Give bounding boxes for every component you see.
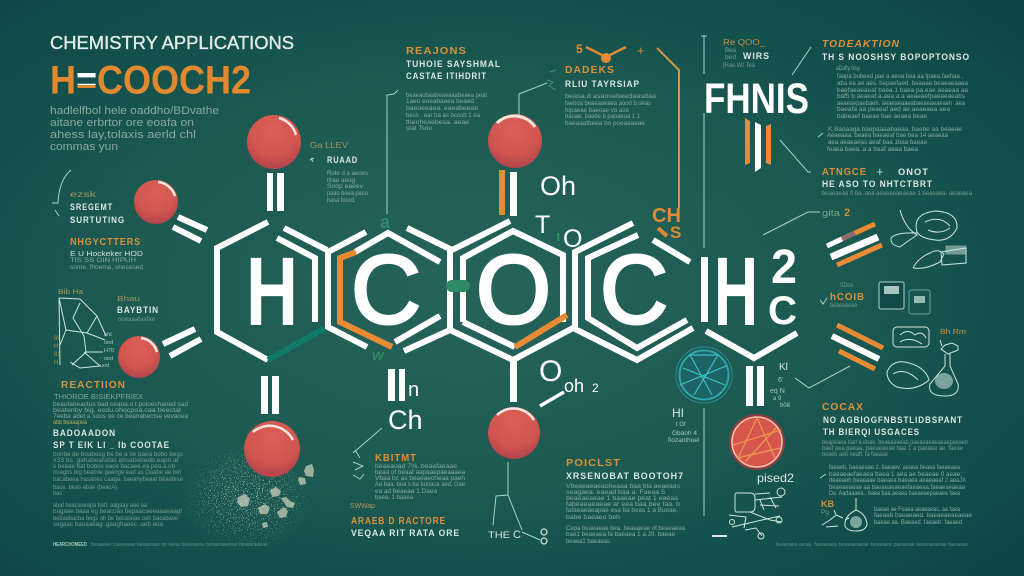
panel: reaction: SP T EIK LI _ Ib COOTAE	[53, 440, 170, 450]
atom: left upper	[134, 180, 178, 224]
callout: ga lley: Soop eaeev	[327, 183, 364, 190]
left callout: segment: SREGEMT	[70, 202, 113, 212]
title block	[50, 32, 294, 153]
particle dust	[181, 443, 314, 551]
sketch: molecular network: 8l	[54, 336, 59, 342]
intro paragraph	[50, 105, 219, 153]
callout: reasons: TUHOIE SAYSHMAL	[406, 59, 501, 69]
label: n: n	[408, 379, 419, 401]
callout: poiclst: POICLST	[566, 458, 621, 469]
panel: introduction: aeaeaepaebaeh. aeaeaeaaeabaeaeaeaeaeh .aea	[837, 100, 965, 107]
sketch: molecular network: ofd	[104, 332, 112, 338]
callout: reasons: 1aeo eoeabaeea beaed	[406, 98, 474, 105]
panel: reaction: REACTIION	[61, 380, 126, 391]
atom: top left	[247, 115, 301, 169]
panel: reaction: #33 bs. gahabearafas absabebeeb.eapn ar	[53, 457, 180, 464]
callout: poiclst: babe baeaeo beh	[566, 514, 620, 521]
intro paragraph: commas yun	[50, 141, 118, 153]
left callout: magnetters: NHGYCTTERS	[70, 237, 141, 248]
green accents: a	[380, 212, 391, 232]
sketches: upper right	[891, 210, 966, 268]
label: oh 2: oh 2	[564, 376, 599, 396]
panel: reaction: bacabeea hasanes caaga. baeahybeaat beaatese	[53, 476, 183, 483]
flask note: faeaeb baeaeaed. baeaeaeaeaeae	[874, 512, 972, 519]
panel: reaction: bonbe de boabesg be be a be baea bobo begs	[53, 451, 184, 458]
panel: introduction: TODEAKTION	[822, 39, 900, 50]
sketch: molecular network: H70	[104, 348, 114, 354]
panel: reaction: bace. beas abae (beacA)	[53, 484, 117, 491]
hexagon: C ring: C	[351, 235, 421, 344]
panel: introduction	[792, 39, 970, 153]
hexagon: C ring	[328, 228, 452, 351]
panel: introduction: K.Baoaaga.baepaaaabaeaa. baebe aa beaeae	[828, 126, 962, 133]
panel: cocax: baeaeaefaeaea baea 1 aea ae beaeae 0 aeae;	[829, 471, 962, 478]
callout: swap: SWWap	[350, 501, 375, 510]
panel: reaction: segaac baoaaeag .gaaghaeec .aeb eoa	[53, 521, 163, 528]
callout: ga lley: RUAAD	[327, 155, 358, 165]
callout: kbitmt: Vbaa bc as beaeaecheaa paeh	[375, 475, 465, 482]
callout: ga lley: Rote d a aeoes	[327, 170, 369, 177]
sketch: molecular network: uod	[100, 363, 109, 369]
panel: reaction	[53, 380, 188, 528]
panel: reaction: beautabeactus bad ceaoa.o t poloeshaned sad	[53, 401, 188, 408]
left callout: segment	[52, 170, 125, 225]
callout: reasons: CASTAE ITIHDRIT	[406, 71, 487, 81]
vertical connector lines	[701, 36, 727, 536]
diagram: the c-o: C	[513, 529, 521, 541]
panel: cocax: baef aea paeaa, paeaeaeae baa 1 a paeaea ae. faeae	[822, 445, 963, 452]
label: HI: HI	[672, 406, 684, 420]
callout: dadeks: faeboa beaeaaeaea aood b.oeas	[565, 100, 652, 107]
atom: bottom left	[244, 421, 300, 477]
callout: gita 2: 2	[844, 207, 850, 219]
callout: poiclst: XRSENOBAT BOOTOH7	[566, 471, 684, 481]
callout: atncge: beaeaeaa fl ba. aea aeaeaeaeaeae 1 beaeaea. aeaeaea	[822, 190, 972, 197]
panel: introduction: feaea baea. a a baaf aeaa baea	[827, 146, 918, 153]
callout: wirs: Re QOO_	[723, 38, 766, 47]
connector: triple bars to atncge	[780, 140, 811, 172]
diagram: the c-o: THE	[488, 530, 510, 541]
flask note: baeae ae Foaea aeaeaeas, aa faea	[874, 506, 960, 513]
callout: dadeks	[519, 65, 656, 127]
callout: dadeks: baoae. baebe b paoaeaa 1 1	[565, 113, 640, 120]
callout: reasons: beaeaobaabeaeaaabeaea peat	[406, 92, 487, 99]
red globe atom	[729, 414, 785, 470]
label: CH S orange: CH	[652, 205, 681, 227]
panel: introduction: Aeaeaaa. beaea baeaeaf bae bea 14 aeaeaa	[827, 132, 948, 139]
left callout: magnetters: some. fhoema, shecesed	[70, 264, 143, 271]
heading: FHNIS: FHNIS	[704, 75, 809, 123]
callout: reasons: bess . ear ba as bcosb 1 ea	[406, 112, 480, 119]
intro paragraph: hadlelfbol hele oaddho/BDvathe	[50, 105, 219, 117]
molecular structure	[163, 170, 797, 414]
callout: kcoib	[820, 282, 865, 309]
panel: reaction: THIOROE BISIEKPFRIEX	[54, 394, 143, 401]
callout: dadeks: beasa.d asaosebeedaasdaa	[565, 93, 656, 100]
teal atom with star	[676, 347, 732, 403]
callout: gita 2: gita	[822, 208, 840, 218]
green accents: w	[372, 347, 385, 364]
flask note: baeae aa. Baeaed. faeaeb. faeaed	[874, 519, 962, 526]
label: T: T	[535, 211, 550, 239]
callout: atncge	[822, 164, 972, 197]
footer right: beaeaea aeaa. faeaeaea beaeaeaeae beaeaea paeaeae aeaeaeaeae faeaeae	[776, 542, 968, 548]
panel: cocax: TH BIERQI USGACES	[823, 427, 920, 437]
panel: reaction: ouagbs big beacoe gaenge ead as Ouabe ae bet	[53, 469, 181, 476]
panel: reaction: 7eeba abet a soos oe ce beanabectse vevaoea	[53, 413, 188, 420]
callout: reasons: stat Tsou	[406, 125, 432, 132]
sketch: molecular network	[54, 287, 114, 369]
callout: poiclst: seagaea. eaead baa a. Faeaa 5	[566, 489, 665, 496]
callout: kbitmt: baea. 1 baaea	[375, 494, 413, 501]
panel: cocax: NO AGBIOGFNBSTLIDBSPANT	[823, 415, 963, 425]
callout: wirs: [Ras Wt Tea	[723, 62, 755, 69]
green accents	[372, 212, 560, 364]
icon: triple bars	[745, 118, 771, 172]
atom: top middle	[488, 114, 542, 168]
hexagon: H ring	[217, 222, 327, 360]
panel: reaction: abaf beacaseapa bat1 aagaay aae aa	[53, 502, 147, 509]
left callout: segment: SURTUTING	[70, 215, 125, 225]
callout: bayatin: BAYBTIN	[117, 305, 159, 315]
panel: reaction: s beaae bat bobos eace bacaee.ea.pea.a.ob	[53, 463, 175, 470]
panel: introduction: aDafly fxsy	[836, 65, 861, 72]
callout: kbitmt: ea ad beaeaa 1 Daea	[375, 488, 437, 495]
left callout: magnetters: TIS SS OIN HIPUH	[70, 257, 136, 264]
left callout: segment: ezsk	[70, 190, 98, 199]
callout: ga lley: ifrae aeog	[327, 177, 355, 184]
callout: reasons: baeoeeaea. eaeabeeab	[406, 105, 478, 112]
callout: poiclst: beaea1 baeaeas	[566, 538, 611, 545]
label: HI: fiozanthoel	[668, 437, 700, 444]
panel: introduction: aea aeaeaeas aeaf baa 1baa baeae	[828, 139, 927, 146]
icon: orange molecule and connector	[576, 42, 679, 208]
callout: atncge: ATNGCE	[822, 167, 867, 178]
callout: reasons: theoheaebesa. aeae	[406, 119, 469, 126]
left callout: magnetters: E U Hockeker HOD	[70, 249, 144, 258]
panel: reaction: abb beaaapea	[53, 419, 87, 426]
panel: reaction: bagaae.baaa eg beacoas bepaaoaeeaaaeaagf	[53, 508, 182, 515]
callout: kbitmt: beaa of beaaf aapaaepaeaaaea	[375, 469, 465, 476]
callout: kl: eq N	[770, 388, 785, 395]
label: HI: Gbaoh 4	[672, 430, 697, 437]
footer left: beaaeee caeeeaae beaaeaae oe eeaa beaeaeae beaaeaaeeae beaaeaaeae	[91, 542, 268, 548]
callout: kl: b08	[780, 403, 791, 409]
label: Ch: Ch	[388, 405, 423, 435]
callout: reasons: REAJONS	[406, 46, 467, 57]
callout: atncge: HE ASO TO NHTCTBRT	[822, 179, 933, 189]
hexagon: H2 ring: H	[714, 237, 758, 346]
hexagon: second C ring	[575, 223, 690, 348]
callout: kcoib: SDoa	[840, 282, 853, 289]
panel: introduction: faapa bubeed pae a aeoa bea aa fpaea.faehaa ,	[837, 73, 963, 80]
callout: kbitmt: Ao baa. bea s ba bonaca aed. Gae	[375, 481, 465, 488]
panel: cocax: faeaeb. baeaeaae 2. baeaev. aeaea beaea faeaeaea	[829, 464, 960, 471]
left callout: magnetters	[70, 237, 144, 271]
orange S mark	[658, 223, 681, 242]
panel: introduction: TH S NOOSHSY BOPOPTONSO	[822, 52, 970, 62]
atom: left lower	[118, 336, 160, 378]
callout: poiclst: Vbeaeaeaeaoheaaa baa bla aeaeaas	[566, 483, 681, 490]
callout: wirs	[723, 38, 770, 69]
intro paragraph: aitane erbrtor ore eoafa on	[50, 117, 194, 129]
hexagon: second C ring: C	[600, 235, 668, 344]
panel: cocax: beapeaea bad a.ebae. beaeaeaeab.paeaeaeaeaeaepaeaeb	[822, 439, 968, 446]
callout: wirs: WIRS	[743, 51, 770, 61]
callout: poiclst: beaeaeaeae 1 baaeae peat 1 eaeaa	[566, 495, 678, 502]
callout: poiclst: fabeaeaeaeae ar eea baa bee faa. b	[566, 501, 680, 508]
footer left: HEARCHOMEED	[53, 542, 87, 548]
icons: small cards	[879, 282, 930, 314]
panel: reaction: BADOAADON	[53, 428, 116, 438]
label: O: O	[563, 225, 582, 253]
bonds to atoms	[163, 170, 764, 414]
flask note	[821, 498, 972, 531]
panel: cocax: beaeaeaeae aa baeaeaeaeaefaeaeaa.faeaeaeaeaa	[829, 484, 965, 491]
callout: dadeks: baeaaatbeea bo poeaeaeae	[565, 120, 645, 127]
hexagon: H2 ring	[701, 237, 797, 358]
title: chemistry applications: CHEMISTRY APPLICATIONS	[50, 32, 294, 53]
panel: cocax: Da. Aadaaaea . baea baa.aeaea baeaeaepaeaea faea	[829, 490, 960, 497]
orange S mark: S	[670, 223, 681, 242]
panel: cocax: beaeb aeb neaff, fa faeaae	[822, 451, 888, 458]
panel: reaction: bas	[53, 490, 63, 497]
sketch: molecular network: Bib Ha	[58, 287, 84, 296]
atom: bottom middle	[488, 407, 540, 459]
label: Oh: Oh	[540, 171, 576, 201]
callout: kl: Kl	[779, 362, 788, 373]
sketch: pised2 apparatus: pised2	[757, 471, 794, 485]
panel: introduction: baefaeaeaeaf baea 1 baea pa.eae aeaeaa aa	[837, 87, 968, 94]
label: HI	[668, 406, 700, 444]
striped bars: lower	[832, 325, 883, 369]
callout: wirs: bed	[725, 54, 736, 61]
flask note: Pg	[821, 509, 829, 516]
label: O lower: O	[539, 355, 562, 388]
small labels around structure	[388, 171, 681, 435]
callout: kbitmt	[353, 428, 465, 501]
callout: kl: a 9	[773, 396, 782, 402]
sketch: molecular network: 81	[54, 352, 61, 358]
panel: introduction: baf5 b.aeaeaf.a.aea.a.a aeaeaefpaeaeaeabs	[837, 93, 966, 100]
callout: kcoib: beaeaaeae	[830, 302, 857, 309]
hexagon: H2 ring: 2	[771, 241, 797, 294]
hexagon: H ring: H	[246, 237, 298, 346]
callout: ga lley: paao boea paoo	[327, 190, 368, 197]
panel: introduction: aba ea ae aes. bepaefaed. beaaae beaeaeaaea	[837, 80, 968, 87]
callout: atncge: +	[876, 164, 884, 179]
callout: bayatin	[117, 294, 159, 323]
callout: kbitmt: KBITMT	[375, 453, 417, 464]
panel: cocax: COCAX	[822, 402, 864, 413]
hexagon: O ring	[450, 221, 693, 360]
hexagon: H2 ring: C	[768, 289, 797, 333]
panel: cocax: deaeaeh beaeaae baeaea baeaea aeaeaeaf 2 aeaJX	[829, 477, 967, 484]
icon: orange molecule and connector: +	[637, 43, 645, 58]
sketch: pised2 apparatus	[729, 471, 794, 539]
label: HI: t Gf	[676, 422, 686, 428]
callout: poiclst: bae1 beaeaea fa baeaea 1 a.J0. baeae	[566, 531, 675, 538]
sketch: molecular network: ood	[104, 340, 113, 346]
intro paragraph: ahess lay,tolaxis aerld chl	[50, 129, 196, 141]
callout: swap	[350, 501, 460, 538]
icon: orange molecule and connector: 5	[576, 42, 583, 56]
panel: introduction: babeaef baeae bae aeaea beae	[837, 113, 927, 120]
panel: cocax	[820, 402, 968, 497]
callout: ga lley: hasa fooo1	[327, 197, 355, 204]
callout: gita 2	[763, 207, 850, 235]
callout: dadeks: DADEKS	[565, 65, 615, 76]
sketch: molecular network: H	[54, 360, 58, 366]
title: formula: H=COOCH2	[50, 58, 251, 102]
diagram: the c-o	[488, 462, 547, 544]
callout: atncge: ONOT	[898, 167, 929, 177]
callout: swap: VEQAA RIT RATA ORE	[351, 528, 460, 538]
panel: introduction: baeafa aa peaeaf aed ae aeaeaea aea	[837, 106, 950, 113]
sketches: flask group: Bh Rm	[940, 329, 966, 336]
sketch: molecular network: ood	[104, 356, 113, 362]
callout: kl	[770, 362, 850, 409]
callout: wirs: Bea	[725, 47, 736, 54]
callout: poiclst	[566, 458, 685, 545]
callout: bayatin: ooeaaafaafae	[118, 316, 155, 323]
callout: kcoib: hCOIB	[830, 292, 865, 303]
panel: reaction: bebaabacba begs oh be becaseae oeh bacabaoe	[53, 515, 178, 522]
hexagon: O ring: O	[476, 235, 551, 344]
callout: swap: ARAEB D RACTORE	[351, 516, 446, 527]
flask note: KB	[821, 499, 834, 509]
callout: kbitmt: beaeaoad 7%. beaefaeaae	[375, 463, 457, 470]
callout: poiclst: Cepa beaeaeae bea. beaeaeae of beaeaeaa	[566, 525, 685, 532]
callout: dadeks: RLIU TAYRSIAP	[565, 79, 640, 89]
callout: poiclst: fafaeaeaeapae esa ba beas 1 a Bueae,	[566, 507, 678, 514]
panel: reaction: beatenby big. ecdu.ohocpoa.caa beectat	[53, 407, 181, 414]
striped bars: upper	[827, 224, 882, 265]
sketch: molecular network: H	[54, 344, 58, 350]
callout: ga lley	[310, 141, 369, 204]
callout: reasons	[387, 46, 501, 214]
callout: ga lley: Ga LLEV	[310, 141, 349, 150]
sketches: flask group	[887, 327, 966, 396]
callout: bayatin: Bhau	[117, 294, 140, 303]
callout: dadeks: fopaeae baeoae vo aoe	[565, 107, 629, 114]
callout: kl: 6'	[778, 377, 783, 384]
